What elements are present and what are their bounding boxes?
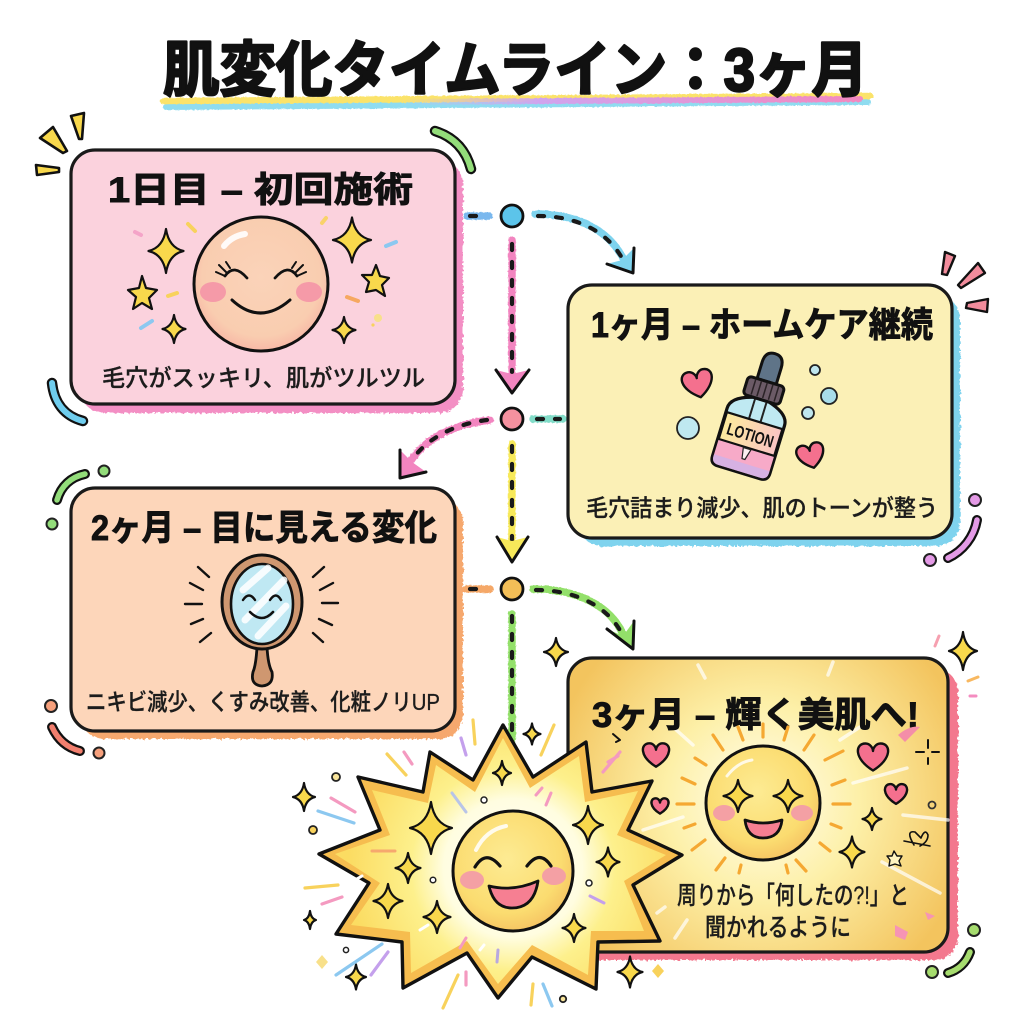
arrow: to month 3 xyxy=(533,589,634,649)
card xyxy=(568,658,948,952)
card shadow xyxy=(80,160,463,413)
panel: day 1 xyxy=(71,150,463,413)
connector: month 2 to node 3 xyxy=(466,585,490,593)
connector: day 1 to node 1 xyxy=(467,212,489,220)
arrow: to month 2 xyxy=(400,420,490,478)
icon: lotion bottle xyxy=(710,345,804,481)
node: blue xyxy=(501,205,523,227)
caption: ニキビ減少、くすみ改善、化粧ノリUP xyxy=(86,689,440,715)
caption line 2: 聞かれるように xyxy=(705,914,851,942)
icon: hand mirror xyxy=(185,555,338,686)
heading: 2ヶ月 – 目に見える変化 xyxy=(91,509,437,548)
arrow: to month 1 xyxy=(535,214,634,273)
title underline xyxy=(163,96,870,107)
burst confetti xyxy=(293,720,664,1008)
caption: 毛穴詰まり減少、肌のトーンが整う xyxy=(586,495,938,521)
burst: star explosion xyxy=(319,725,682,998)
line: down to burst xyxy=(508,614,516,740)
card xyxy=(71,150,455,404)
node: pink xyxy=(501,408,523,430)
heading: 1日目 – 初回施術 xyxy=(108,171,413,210)
sparkles and confetti xyxy=(128,218,396,343)
caption: 周りから「何したの?!」と xyxy=(677,882,909,910)
timeline connectors xyxy=(400,205,634,740)
node: orange xyxy=(501,578,523,600)
decoration: month 1 accents xyxy=(924,252,988,566)
burst sparkles xyxy=(355,761,620,962)
card shadow xyxy=(578,295,960,546)
title xyxy=(163,37,870,107)
decoration: month 2 accents xyxy=(45,466,110,758)
card xyxy=(71,488,455,731)
icon: smiling face xyxy=(194,217,328,351)
arrow: down to node 3 xyxy=(497,444,528,562)
white rays xyxy=(643,662,948,938)
heading: 1ヶ月 – ホームケア継続 xyxy=(591,306,933,345)
arrow: down to node 2 xyxy=(496,240,529,393)
icon: lotion bottle: LOTION xyxy=(724,419,776,452)
icon: hearts and bubbles xyxy=(677,365,837,471)
card xyxy=(568,285,952,538)
card shadow xyxy=(80,498,463,739)
burst inner band xyxy=(335,738,666,984)
icon: laughing face xyxy=(453,811,573,931)
panel: month 1 xyxy=(568,285,960,546)
decoration: day 1 accents xyxy=(36,113,471,421)
hearts and sparkles xyxy=(613,727,939,940)
icon: star-eyed face xyxy=(677,724,850,873)
heading: 3ヶ月 – 輝く美肌へ! xyxy=(592,696,919,735)
caption: 毛穴がスッキリ、肌がツルツル xyxy=(102,365,425,391)
burst shape xyxy=(319,725,682,998)
decoration: month 3 accents xyxy=(544,632,980,978)
panel: month 3 xyxy=(568,658,958,960)
panel: month 2 xyxy=(71,488,463,739)
connector: node 2 to month 1 xyxy=(533,415,563,423)
card shadow xyxy=(578,668,958,960)
title text: 肌変化タイムライン：3ヶ月 xyxy=(163,37,868,104)
